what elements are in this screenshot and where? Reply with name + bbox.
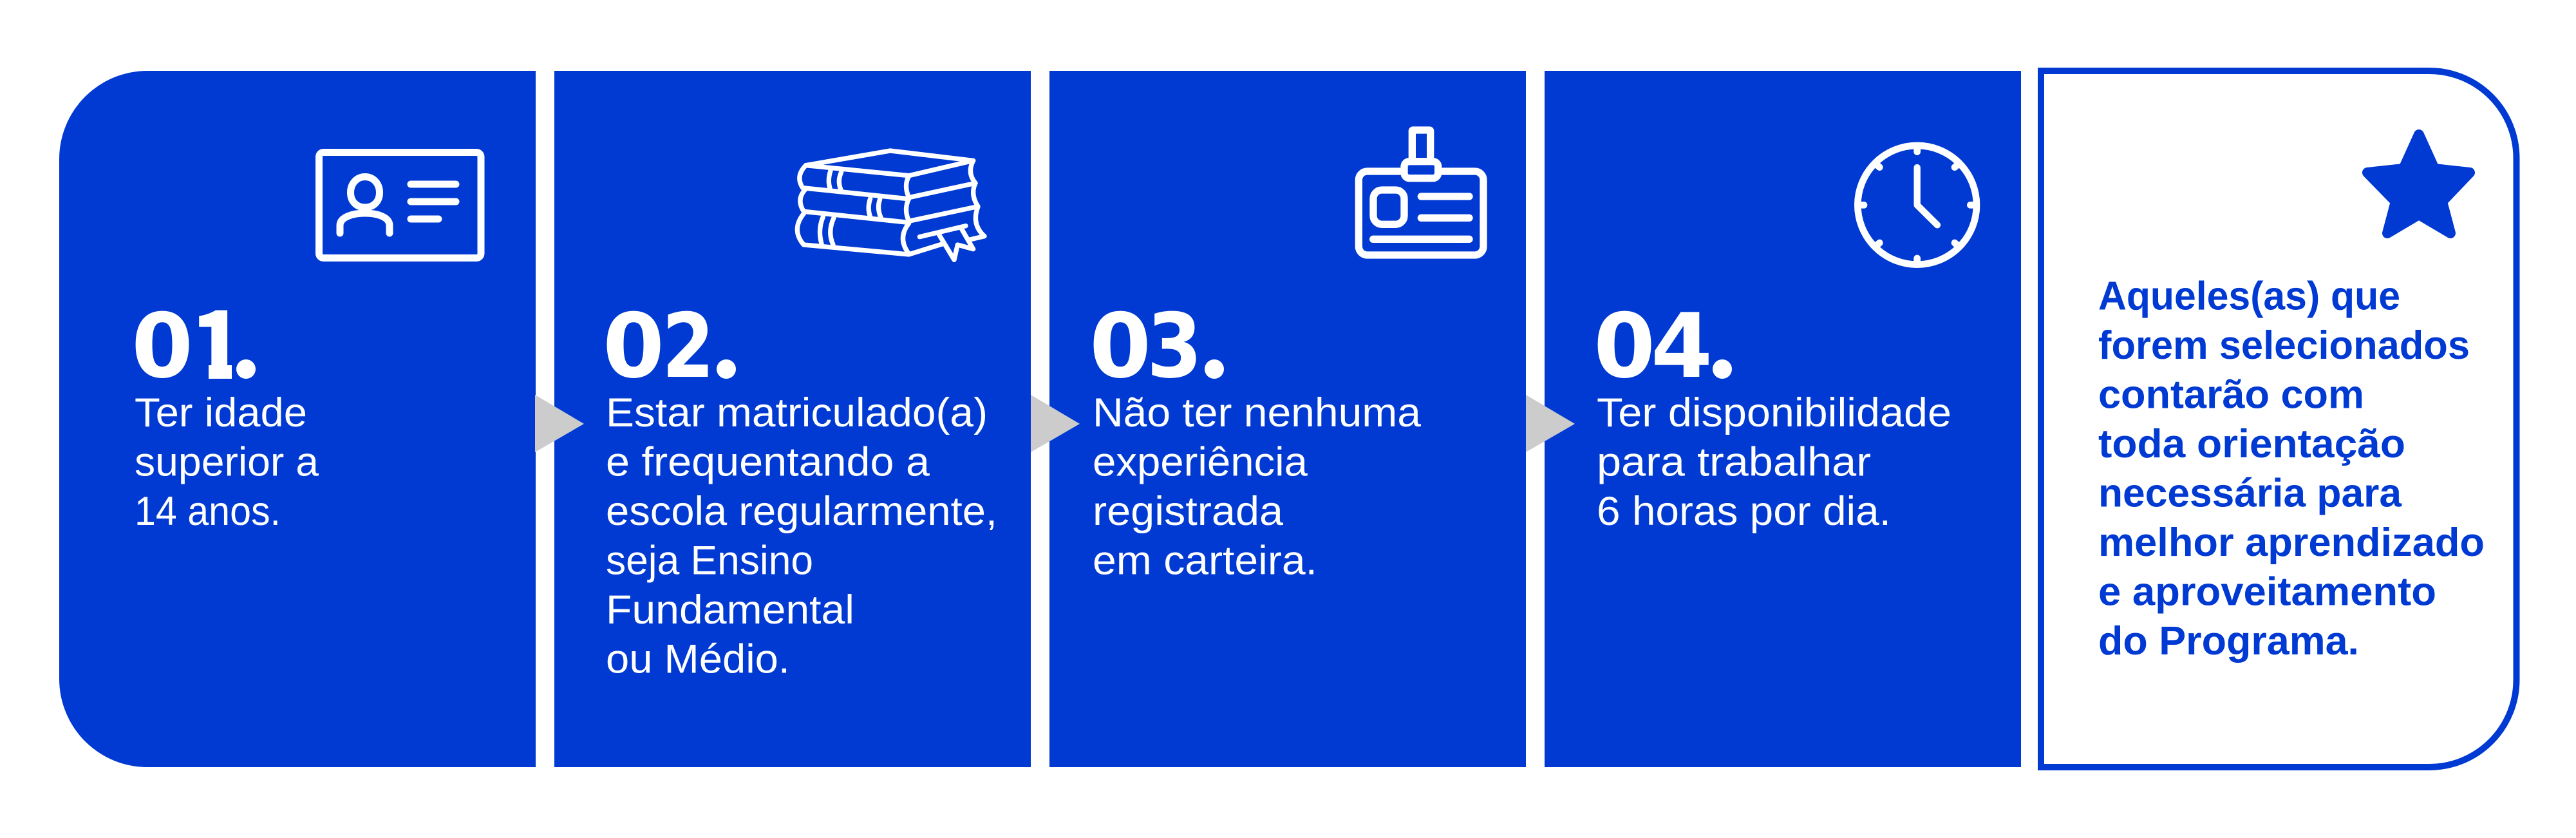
arrow: step 2 to step 3 [1031, 395, 1080, 452]
text: closing note: toda orientação [2098, 422, 2405, 466]
text: step 1 description: 14 anos. [135, 489, 281, 534]
step number 02: . [717, 316, 735, 388]
step number 01: 1 [191, 271, 245, 404]
arrow: step 3 to step 4 [1526, 395, 1575, 452]
step number 01: 0 [131, 294, 193, 398]
text: step 3 description: em carteira. [1093, 538, 1317, 584]
step number 04 [1594, 294, 1732, 398]
text: step 2 description: Fundamental [606, 587, 854, 633]
icon: clock [1857, 146, 1977, 265]
text: step 3 description: registrada [1093, 489, 1284, 534]
text: step 4 description: 6 horas por dia. [1597, 489, 1891, 534]
panel: step 1 [59, 71, 536, 767]
text: step 2 description: ou Médio. [606, 636, 790, 681]
text: step 2 description [606, 390, 997, 681]
step number 03: . [1205, 316, 1223, 388]
step number 02 [603, 294, 736, 398]
text: step 4 description [1597, 390, 1951, 534]
text: step 4 description: para trabalhar [1597, 439, 1871, 484]
step number 03 [1089, 294, 1224, 398]
icon: star [2367, 135, 2470, 233]
text: closing note: forem selecionados [2098, 323, 2470, 368]
text: step 1 description: Ter idade [135, 390, 307, 435]
text: closing note [2098, 274, 2485, 663]
panel: step 2 [554, 71, 1031, 767]
step number 04: . [1713, 316, 1731, 388]
text: step 3 description: Não ter nenhuma [1093, 390, 1422, 435]
step number 04: 4 [1651, 294, 1713, 398]
panel: step 3 [1049, 71, 1526, 767]
arrow: step 1 to step 2 [535, 395, 584, 452]
text: step 2 description: escola regularmente, [606, 489, 997, 534]
text: step 3 description [1093, 390, 1422, 584]
step number 01: . [237, 316, 255, 388]
icon: badge with clip [1359, 130, 1483, 255]
text: closing note: contarão com [2098, 372, 2364, 417]
step number 04: 0 [1594, 294, 1655, 398]
panel: step 4 [1545, 71, 2021, 767]
icon: identity card [319, 152, 481, 258]
text: step 4 description: Ter disponibilidade [1597, 390, 1951, 435]
step number 02: 0 [603, 294, 664, 398]
text: closing note: necessária para [2098, 471, 2402, 515]
text: closing note: Aqueles(as) que [2098, 274, 2400, 318]
panel: closing note [2041, 71, 2516, 767]
step number 02: 2 [662, 295, 715, 398]
text: closing note: do Programa. [2098, 619, 2359, 663]
text: step 1 description: superior a [135, 439, 319, 484]
text: step 2 description: Estar matriculado(a) [606, 390, 988, 435]
text: step 3 description: experiência [1093, 439, 1308, 484]
text: step 2 description: e frequentando a [606, 439, 930, 484]
text: step 2 description: seja Ensino [606, 538, 813, 584]
text: closing note: melhor aprendizado [2098, 520, 2485, 565]
text: closing note: e aproveitamento [2098, 569, 2436, 614]
icon: stack of books [797, 151, 984, 260]
step number 01 [135, 310, 256, 379]
step number 03: 3 [1147, 294, 1202, 398]
text: step 1 description [135, 390, 319, 534]
step number 03: 0 [1089, 294, 1151, 398]
